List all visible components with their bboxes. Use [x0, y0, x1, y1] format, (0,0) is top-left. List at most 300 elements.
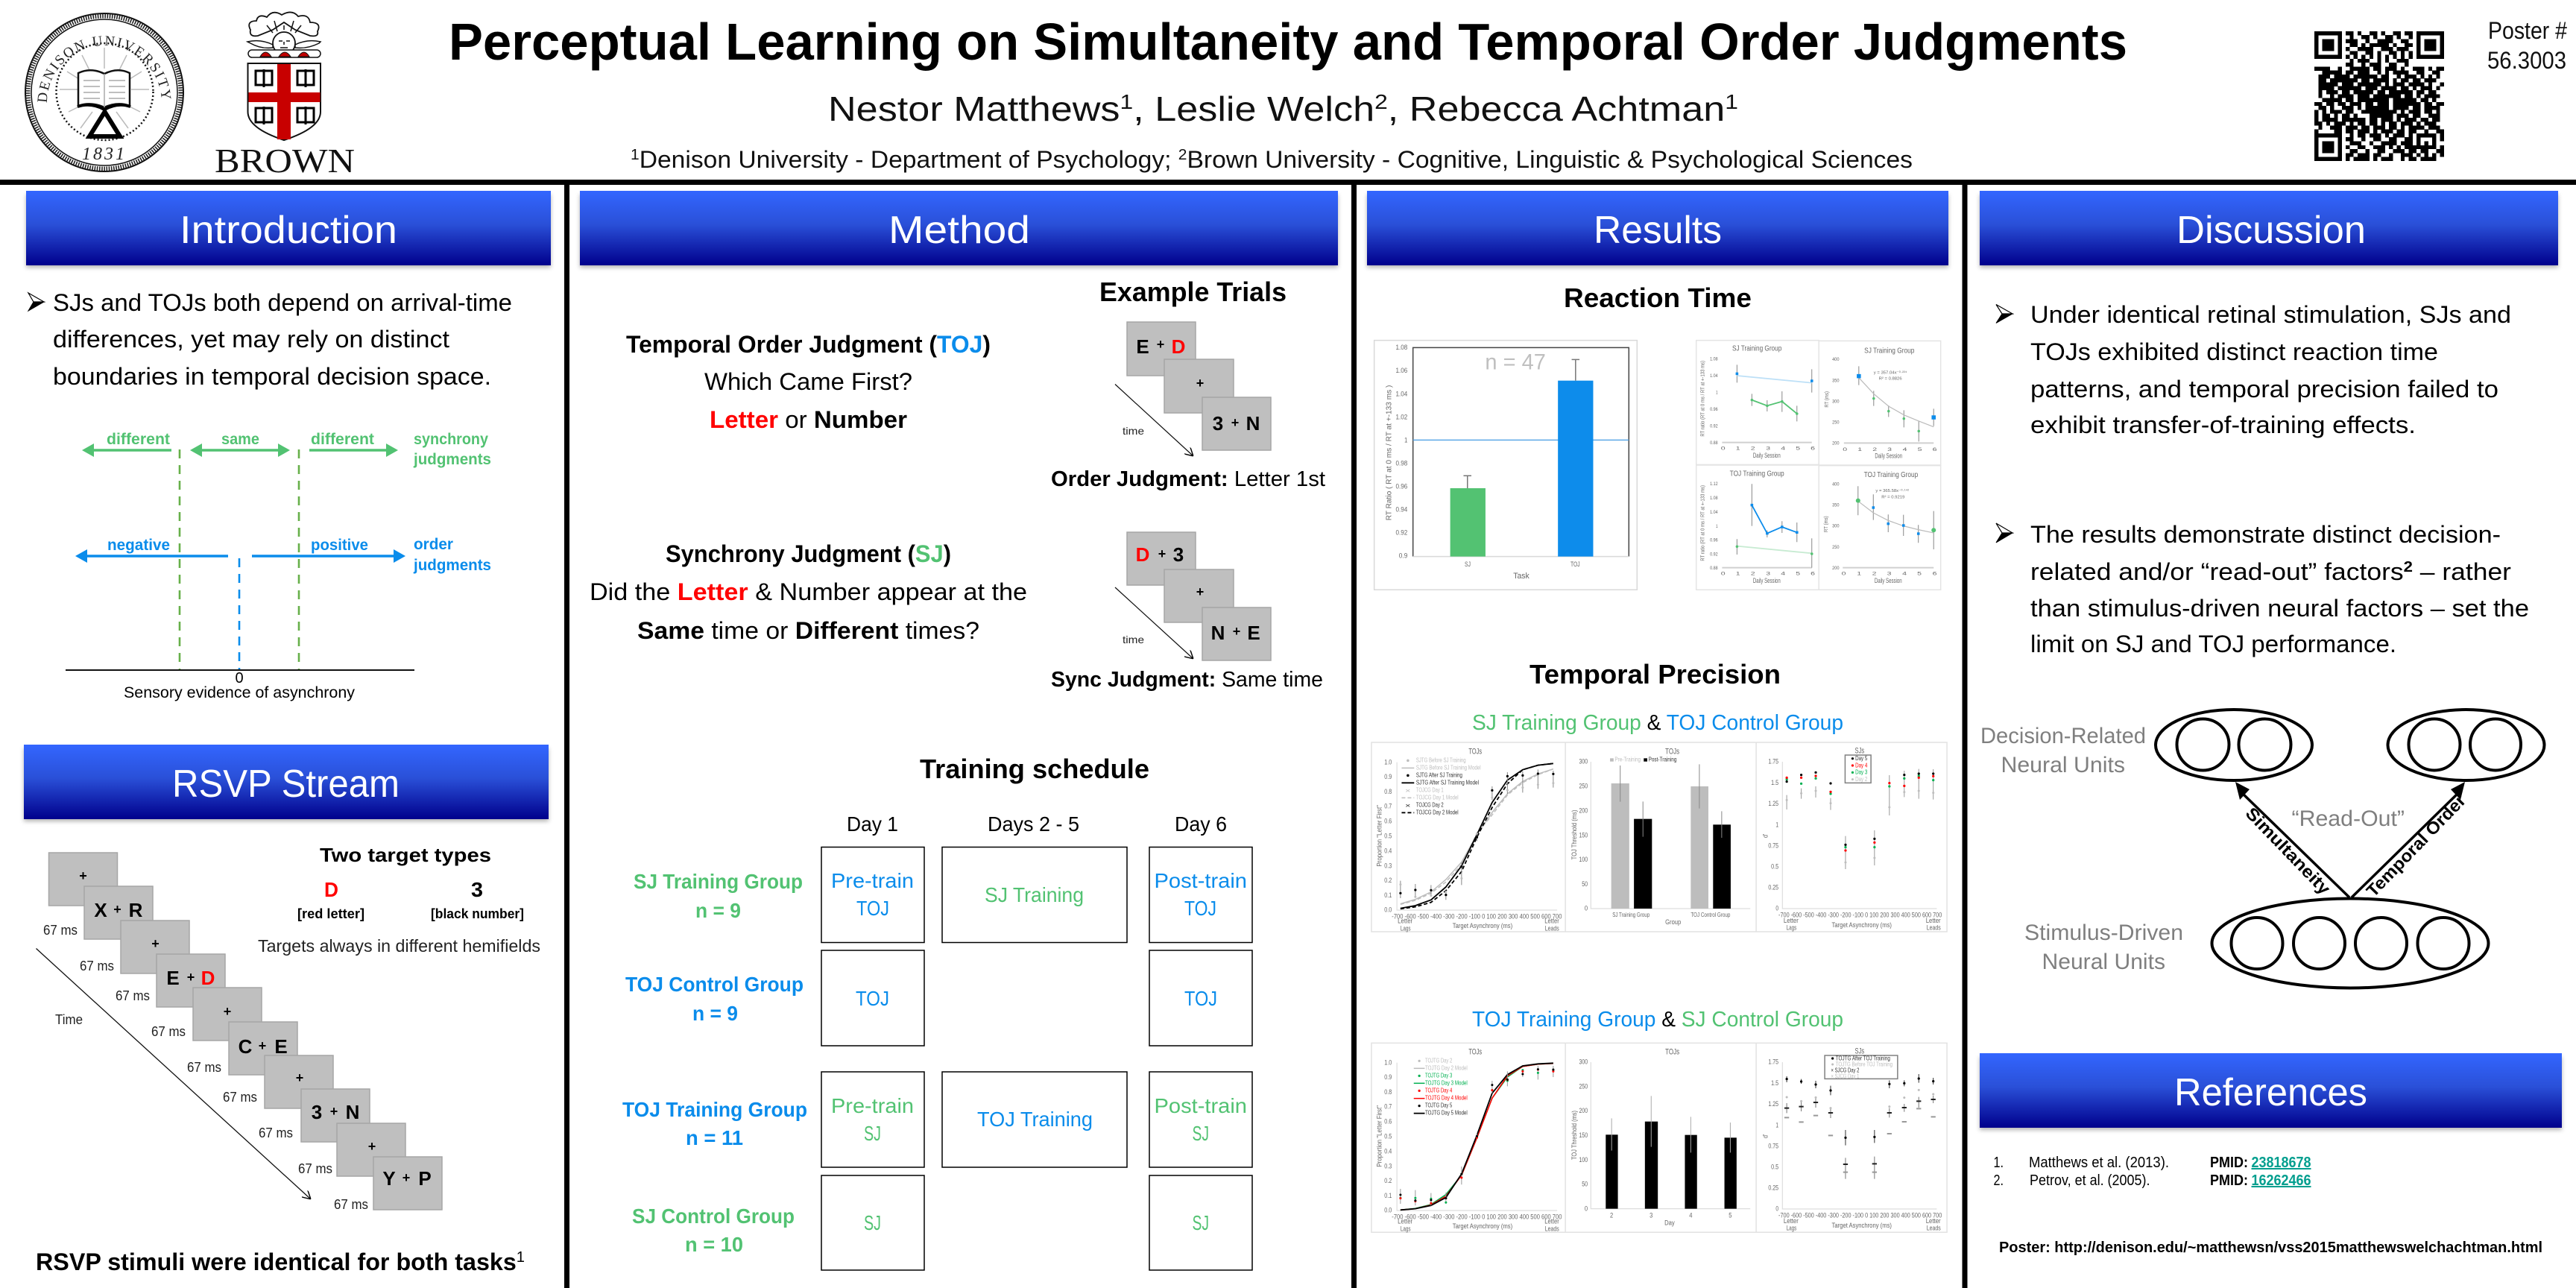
panel: Results: [1367, 191, 1948, 1233]
panel: RSVP Stream: [24, 745, 549, 1275]
line charts: RT by training group: 0123456: [1842, 571, 1937, 576]
chart row: SJ training and TOJ control: Day 5: [1855, 755, 1867, 762]
RSVP frame sequence: Y: [382, 1167, 396, 1190]
frame durations: [43, 923, 368, 1212]
schedule table: Post-train: [1154, 1094, 1247, 1117]
chart row: SJ training and TOJ control: 0.7: [1384, 802, 1392, 810]
schedule table: TOJ: [1184, 987, 1217, 1010]
chart row: SJ training and TOJ control: Group: [1665, 918, 1681, 926]
schedule table: SJ: [864, 1122, 881, 1145]
line charts: RT by training group: RT ratio (RT at 0 ms / RT at +-133 ms): [1700, 485, 1706, 561]
line charts: RT by training group: 0123456: [1721, 446, 1815, 451]
chart row: SJ training and TOJ control: Leads: [1545, 924, 1559, 932]
line charts: RT by training group: 250: [1832, 420, 1840, 425]
line charts: RT by training group: RT ratio (RT at 0 ms / RT at +-133 ms): [1700, 361, 1706, 437]
chart row: SJ training and TOJ control: SJs: [1855, 746, 1864, 756]
reference list: 2.: [1993, 1172, 2004, 1189]
bar chart: RT ratio: 1.02: [1396, 413, 1407, 421]
chart row: SJ training and TOJ control: 0.25: [1768, 883, 1778, 891]
frame durations: 67 ms: [43, 923, 78, 938]
chart row: SJ training and TOJ control: TOJCG Day 2 Model: [1416, 809, 1459, 816]
diagram: decision boundaries: [66, 431, 491, 701]
chart row: TOJ training and SJ control: 250: [1579, 1082, 1588, 1090]
line charts: RT by training group: 1.04: [1710, 373, 1718, 379]
example: order judgment trial: N: [1246, 412, 1260, 435]
chart row: SJ training and TOJ control: TOJs: [1468, 747, 1482, 757]
RSVP frame sequence: X: [94, 899, 107, 921]
chart row: SJ training and TOJ control: Day 4: [1855, 763, 1867, 769]
chart row: TOJ training and SJ control: Target Asynchrony (ms): [1453, 1222, 1512, 1230]
chart row: SJ training and TOJ control: 0.0: [1384, 906, 1392, 914]
schedule group labels: SJ Training Group: [634, 870, 803, 893]
chart row: SJ training and TOJ control: 0.5: [1771, 862, 1778, 871]
RSVP caption: RSVP stimuli were identical for both tasks: [36, 1248, 513, 1275]
diagram: decision boundaries: Sensory evidence of asynchrony: [124, 684, 356, 701]
bullet text: [28, 289, 512, 390]
example: order judgment trial: 3: [1213, 412, 1223, 435]
line charts: RT by training group: 200: [1832, 565, 1840, 570]
target types legend: [258, 844, 540, 956]
chart row: SJ training and TOJ control: 0.5: [1384, 832, 1392, 840]
RSVP frame sequence: N: [346, 1101, 359, 1123]
example: order judgment trial: D: [1172, 335, 1185, 358]
heading: Method: [580, 191, 1338, 268]
example: sync judgment trial: +: [1233, 624, 1240, 639]
chart row: SJ training and TOJ control: Letter: [1544, 917, 1559, 925]
schedule table: Day 6: [1175, 812, 1227, 836]
bullet text: SJs and TOJs both depend on arrival-time: [53, 289, 512, 316]
chart row: SJ training and TOJ control: d': [1761, 833, 1770, 838]
line charts: RT by training group: 0.88: [1710, 565, 1718, 570]
line charts: RT by training group: R² = 0.8826: [1879, 376, 1902, 381]
line charts: RT by training group: [1696, 341, 1941, 590]
panel: Discussion: [1980, 191, 2558, 988]
chart row: TOJ training and SJ control: 1: [1775, 1121, 1778, 1129]
chart row: SJ training and TOJ control: 300: [1579, 757, 1588, 765]
schedule table: Days 2 - 5: [988, 812, 1079, 836]
chart row: SJ training and TOJ control: 50: [1582, 880, 1588, 888]
line charts: RT by training group: 0.96: [1710, 537, 1718, 543]
RSVP frame sequence: +: [259, 1038, 266, 1053]
bar chart: RT ratio: 0.94: [1396, 505, 1408, 514]
heading: Discussion: Discussion: [2176, 209, 2366, 252]
line charts: RT by training group: 200: [1832, 441, 1840, 446]
chart row: SJ training and TOJ control: 0.4: [1384, 847, 1392, 855]
QR code: [2314, 34, 2444, 159]
chart row: SJ training and TOJ control: ×: [1405, 803, 1411, 809]
diagram: decision boundaries: synchrony: [414, 431, 488, 448]
chart row: SJ training and TOJ control: 200: [1579, 806, 1588, 815]
chart row: SJ training and TOJ control: -700 -600 -500 -400 -300 -200 -100 0 100 200 300 400 500 600 700: [1778, 911, 1942, 919]
heading: Results: Results: [1594, 209, 1722, 252]
target types legend: Two target types: [320, 844, 491, 866]
chart row: TOJ training and SJ control: Target Asynchrony (ms): [1832, 1222, 1892, 1229]
chart row: TOJ training and SJ control: 3: [1650, 1211, 1653, 1219]
logo: Brown University crest: BROWN: [215, 142, 355, 180]
diagram: neural units read-out: Neural Units: [2042, 950, 2165, 974]
chart row: TOJ training and SJ control: × SJCG Day 1: [1831, 1073, 1859, 1080]
chart row: SJ training and TOJ control: Leads: [1927, 924, 1941, 932]
schedule table: Pre-train: [831, 1094, 914, 1117]
bullet: second conclusion: limit on SJ and TOJ performance.: [2030, 631, 2396, 657]
chart row: TOJ training and SJ control: 0.25: [1768, 1184, 1778, 1192]
diagram: neural units read-out: “Read-Out”: [2291, 806, 2405, 831]
chart row: SJ training and TOJ control: TOJCG Day 1 Model: [1416, 795, 1459, 801]
heading: References: References: [2174, 1071, 2367, 1114]
chart row: TOJ training and SJ control: Leads: [1927, 1224, 1941, 1232]
bar chart: RT ratio: RT Ratio ( RT at 0 ms / RT at +-133 ms ): [1384, 385, 1393, 520]
chart row: SJ training and TOJ control: SJTG After SJ Training Model: [1416, 780, 1479, 786]
chart row: TOJ training and SJ control: d': [1761, 1134, 1770, 1138]
line charts: RT by training group: y = 357.04x⁻⁰·²²⁴: [1874, 370, 1907, 375]
target types legend: 3: [471, 878, 483, 901]
line charts: RT by training group: 0.92: [1710, 423, 1718, 429]
chart row: TOJ training and SJ control: Letter: [1926, 1217, 1941, 1225]
reference list: 16262466: [2251, 1172, 2311, 1189]
line charts: RT by training group: 400: [1832, 356, 1840, 362]
authors: Nestor Matthews: [828, 89, 1085, 128]
chart row: SJ training and TOJ control: 150: [1579, 831, 1588, 839]
authors: 2: [1374, 90, 1388, 113]
frame durations: 67 ms: [116, 988, 150, 1003]
line charts: RT by training group: Daily Session: [1875, 577, 1902, 584]
chart row: SJ training and TOJ control: 0: [1775, 904, 1778, 912]
chart row: TOJ training and SJ control: TOJTG Day 4: [1425, 1087, 1452, 1094]
chart row: TOJ training and SJ control: 0.1: [1384, 1192, 1392, 1199]
chart row: SJ training and TOJ control: SJTG After SJ Training: [1416, 772, 1462, 779]
chart row: TOJ training and SJ control: Leads: [1545, 1225, 1559, 1233]
bar chart: RT ratio: SJ: [1465, 561, 1471, 568]
chart row: TOJ training and SJ control: TOJTG Day 2 Model: [1425, 1065, 1468, 1072]
chart row: TOJ training and SJ control: 0.6: [1384, 1117, 1392, 1126]
line charts: RT by training group: 400: [1832, 482, 1840, 487]
chart row: SJ training and TOJ control: Target Asynchrony (ms): [1832, 921, 1892, 929]
line charts: RT by training group: 1.12: [1710, 481, 1718, 486]
diagram: decision boundaries: judgments: [413, 557, 491, 574]
diagram: neural units read-out: Stimulus-Driven: [2024, 921, 2183, 945]
text: TOJ task description: Temporal Order Judgment (TOJ): [626, 331, 991, 358]
schedule table: Post-train: [1154, 869, 1247, 892]
line charts: RT by training group: 1.08: [1710, 356, 1718, 362]
chart row: SJ training and TOJ control: Pre-Training: [1614, 757, 1641, 763]
affiliations: 1: [631, 147, 640, 163]
example: sync judgment trial: time: [1123, 634, 1144, 645]
chart row: TOJ training and SJ control: 1.0: [1384, 1058, 1392, 1067]
RSVP frame sequence: R: [129, 899, 143, 921]
chart row: TOJ training and SJ control: 0.8: [1384, 1088, 1392, 1096]
schedule group labels: n = 9: [692, 1002, 738, 1025]
chart row: SJ training and TOJ control: Letter: [1398, 917, 1412, 925]
line charts: RT by training group: 300: [1832, 398, 1840, 404]
chart row: TOJ training and SJ control: TOJTG Day 5: [1425, 1102, 1452, 1109]
chart row: SJ training and TOJ control: 1.0: [1384, 758, 1392, 766]
bullet: first conclusion: Under identical retinal stimulation, SJs and: [2030, 301, 2511, 328]
RSVP frame sequence: E: [274, 1035, 288, 1058]
poster number: [2487, 17, 2567, 74]
RSVP frame sequence: +: [296, 1070, 303, 1085]
chart row: SJ training and TOJ control: TOJ Control Group: [1690, 912, 1730, 918]
schedule table: [821, 812, 1252, 1270]
panel: Introduction: [26, 191, 551, 701]
chart row: SJ training and TOJ control: ×: [1405, 788, 1411, 795]
bar chart: RT ratio: 1: [1404, 436, 1408, 444]
bullet text: differences, yet may rely on distinct: [53, 326, 449, 353]
diagram: neural units read-out: Decision-Related: [1980, 724, 2146, 748]
chart row: SJ training and TOJ control: Letter: [1926, 917, 1941, 924]
line charts: RT by training group: 0.88: [1710, 440, 1718, 445]
text: TOJ task description: Letter or Number: [710, 406, 907, 433]
example: order judgment trial: +: [1196, 376, 1204, 391]
chart row: TOJ training and SJ control: 0.9: [1384, 1073, 1392, 1081]
bar chart: RT ratio: Task: [1513, 571, 1530, 581]
chart row: TOJ training and SJ control: 0.75: [1768, 1142, 1778, 1150]
chart row: SJ training and TOJ control: SJTG Before SJ Training Model: [1416, 765, 1481, 771]
chart row: SJ training and TOJ control: Post-Training: [1649, 757, 1676, 763]
bullet text: boundaries in temporal decision space.: [53, 363, 491, 390]
diagram: decision boundaries: different: [311, 431, 374, 448]
chart row: TOJ training and SJ control: TOJTG Day 5 Model: [1425, 1110, 1468, 1117]
text: SJ task description: Did the Letter & Number appear at the: [590, 578, 1027, 605]
chart row: SJ training and TOJ control: 0.2: [1384, 877, 1392, 884]
chart row: TOJ training and SJ control: Letter: [1784, 1217, 1799, 1225]
schedule table: TOJ Training: [977, 1108, 1093, 1131]
authors: , Rebecca Achtman: [1388, 89, 1725, 128]
bullet: first conclusion: patterns, and temporal precision failed to: [2030, 376, 2498, 402]
chart row: SJ training and TOJ control: 1.25: [1768, 800, 1778, 807]
line charts: RT by training group: 0123456: [1843, 446, 1937, 452]
chart row: TOJ training and SJ control: 0.4: [1384, 1147, 1392, 1155]
subheading: SJ training and TOJ control: SJ Training Group & TOJ Control Group: [1472, 711, 1843, 735]
line charts: RT by training group: 350: [1832, 377, 1840, 383]
heading: Reaction Time: Reaction Time: [1564, 282, 1752, 313]
bullet: second conclusion: 2: [2404, 559, 2413, 575]
chart row: TOJ training and SJ control: Letter: [1544, 1217, 1559, 1225]
caption: order judgment: Order Judgment: Letter 1st: [1051, 467, 1325, 491]
chart row: TOJ training and SJ control: TOJTG Before TOJ Training: [1836, 1061, 1892, 1068]
RSVP frame sequence: +: [151, 936, 160, 951]
logo: Denison University seal: [25, 13, 184, 172]
reference list: [1993, 1155, 2311, 1189]
frame durations: 67 ms: [223, 1090, 257, 1105]
chart row: TOJ training and SJ control: Lags: [1787, 1224, 1796, 1232]
panel: References: [1980, 1053, 2562, 1256]
chart row: TOJ training and SJ control: 150: [1579, 1131, 1588, 1139]
chart row: TOJ training and SJ control: TOJTG Day 4 Model: [1425, 1095, 1468, 1102]
chart row: SJ training and TOJ control: 0: [1585, 904, 1588, 912]
heading: Introduction: Introduction: [180, 209, 397, 252]
poster number: Poster #: [2488, 17, 2567, 44]
line charts: RT by training group: 0.92: [1710, 551, 1718, 557]
schedule table: Pre-train: [831, 869, 914, 892]
chart row: SJ training and TOJ control: Proportion "Letter First": [1375, 805, 1383, 867]
RSVP frame sequence: C: [239, 1035, 253, 1058]
chart row: TOJ training and SJ control: 0.7: [1384, 1102, 1392, 1111]
chart row: TOJ training and SJ control: 300: [1579, 1058, 1588, 1066]
bullet: second conclusion: The results demonstrate distinct decision-: [2030, 521, 2501, 548]
chart row: TOJ training and SJ control: TOJs: [1468, 1047, 1482, 1057]
bullet: second conclusion: related and/or “read-out” factors: [2030, 558, 2367, 585]
chart row: SJ training and TOJ control: 1.75: [1768, 757, 1778, 765]
bullet: first conclusion: [1996, 301, 2511, 438]
chart row: TOJ training and SJ control: Letter: [1398, 1217, 1412, 1225]
caption: sync judgment: Sync Judgment: Same time: [1051, 668, 1323, 692]
schedule group labels: n = 11: [686, 1126, 743, 1149]
chart row: TOJ training and SJ control: 2: [1610, 1211, 1613, 1219]
line charts: RT by training group: 350: [1832, 502, 1840, 508]
chart row: TOJ training and SJ control: 0: [1775, 1205, 1778, 1213]
bar chart: RT ratio: 0.96: [1396, 482, 1408, 490]
line charts: RT by training group: 1: [1716, 389, 1718, 395]
chart row: SJ training and TOJ control: 0.3: [1384, 862, 1392, 870]
chart row: SJ training and TOJ control: 1.5: [1771, 779, 1778, 786]
bar chart: RT ratio: 1.04: [1396, 390, 1408, 398]
text: SJ task description: Synchrony Judgment (SJ): [666, 540, 951, 567]
line charts: RT by training group: 0123456: [1721, 571, 1815, 576]
chart row: SJ training and TOJ control: 1: [1775, 821, 1778, 829]
RSVP frame sequence: +: [79, 868, 87, 883]
poster URL: Poster: http://denison.edu/~matthewsn/vss2015matthewswelchachtman.html: [1999, 1240, 2542, 1256]
bullet: second conclusion: [1996, 521, 2529, 657]
affiliations: Brown University - Cognitive, Linguistic & Psychological Sciences: [1187, 146, 1913, 173]
frame durations: 67 ms: [298, 1161, 332, 1176]
RSVP frame sequence: +: [113, 902, 121, 917]
example: sync judgment trial: [1115, 532, 1271, 660]
authors: 1: [1725, 90, 1738, 113]
chart row: TOJ training and SJ control: 200: [1579, 1107, 1588, 1114]
affiliations: 2: [1178, 147, 1187, 163]
target types legend: [red letter]: [297, 906, 364, 921]
line charts: RT by training group: SJ Training Group: [1864, 346, 1914, 355]
heading: Training schedule: Training schedule: [920, 754, 1149, 784]
bar chart: RT ratio: 1.06: [1396, 367, 1408, 374]
reference list: Petrov, et al. (2005).: [2030, 1172, 2150, 1189]
chart row: TOJ training and SJ control: TOJ Threshold (ms): [1570, 1111, 1578, 1160]
text: SJ task description: Same time or Different times?: [637, 617, 979, 644]
chart row: SJ training and TOJ control: Lags: [1787, 924, 1796, 932]
example: sync judgment trial: N: [1211, 622, 1225, 644]
schedule table: SJ Training: [985, 883, 1084, 906]
bullet: first conclusion: exhibit transfer-of-training effects.: [2030, 411, 2416, 438]
diagram: decision boundaries: positive: [311, 537, 368, 554]
example: sync judgment trial: +: [1196, 584, 1204, 599]
bar chart: RT ratio: 0.92: [1396, 528, 1407, 537]
frame durations: 67 ms: [80, 959, 114, 973]
line charts: RT by training group: RT (ms): [1824, 391, 1830, 408]
chart row: TOJ training and SJ control: 0.0: [1384, 1206, 1392, 1214]
diagram: decision boundaries: different: [107, 431, 170, 448]
bullet: second conclusion: – rather: [2413, 558, 2511, 585]
example: sync judgment trial: 3: [1173, 543, 1184, 566]
reference list: 23818678: [2251, 1155, 2311, 1171]
bar chart: RT ratio: 1.08: [1396, 344, 1408, 351]
heading: Temporal Precision: Temporal Precision: [1530, 659, 1781, 689]
chart row: SJ training and TOJ control: Day 2: [1855, 776, 1867, 783]
chart row: SJ training and TOJ control: TOJCG Day 2: [1416, 802, 1444, 809]
frame durations: 67 ms: [151, 1024, 186, 1039]
chart row: TOJ training and SJ control: Lags: [1401, 1225, 1411, 1233]
heading: Results: [1367, 191, 1948, 268]
diagram: neural units read-out: Neural Units: [2001, 753, 2125, 777]
chart row: TOJ training and SJ control: -700 -600 -500 -400 -300 -200 -100 0 100 200 300 400 500 600 700: [1778, 1211, 1942, 1219]
RSVP frame sequence: 3: [312, 1101, 322, 1123]
schedule table: SJ: [1193, 1122, 1209, 1145]
diagram: neural units read-out: Simultaneity: [2242, 804, 2334, 898]
target types legend: [black number]: [431, 906, 524, 921]
chart row: SJ training and TOJ control: Target Asynchrony (ms): [1453, 922, 1512, 929]
line charts: RT by training group: TOJ Training Group: [1730, 470, 1784, 478]
chart row: TOJ training and SJ control: 5: [1729, 1211, 1732, 1219]
line charts: RT by training group: 300: [1832, 523, 1840, 528]
text: SJ task description: [590, 540, 1027, 644]
RSVP frame sequence: E: [166, 967, 180, 989]
chart row: TOJ training and SJ control: 4: [1689, 1211, 1693, 1219]
chart row: SJ training and TOJ control: 0.8: [1384, 788, 1392, 795]
line charts: RT by training group: Daily Session: [1753, 577, 1781, 584]
heading: Introduction: [26, 191, 551, 268]
diagram: neural units read-out: Temporal Order: [2362, 791, 2469, 900]
chart row: SJ training and TOJ control: 0.75: [1768, 842, 1778, 850]
diagram: neural units read-out: [1980, 710, 2545, 988]
chart row: SJ training and TOJ control: TOJCG Day 1: [1416, 787, 1444, 794]
line charts: RT by training group: y = 365.58x⁻⁰·¹⁴²: [1875, 488, 1909, 493]
arrow: time axis: Time: [55, 1012, 83, 1027]
chart row: TOJ training and SJ control: TOJTG Day 3: [1425, 1073, 1452, 1079]
reference list: PMID:: [2210, 1172, 2248, 1189]
schedule table: TOJ: [856, 987, 889, 1010]
target types legend: Targets always in different hemifields: [258, 936, 540, 956]
schedule table: TOJ: [856, 897, 889, 920]
chart row: TOJ training and SJ control: 0.3: [1384, 1162, 1392, 1170]
heading: RSVP Stream: RSVP Stream: [172, 763, 400, 806]
chart row: TOJ training and SJ control: 50: [1582, 1180, 1588, 1188]
line charts: RT by training group: R² = 0.9219: [1881, 494, 1904, 499]
chart row: SJ training and TOJ control: Letter: [1784, 917, 1799, 924]
line charts: RT by training group: Daily Session: [1875, 452, 1902, 460]
reference list: Matthews et al. (2013).: [2029, 1155, 2169, 1171]
example: order judgment trial: +: [1157, 337, 1164, 352]
chart row: TOJ training and SJ control: 100: [1579, 1156, 1588, 1164]
line charts: RT by training group: RT (ms): [1823, 516, 1829, 532]
example: order judgment trial: time: [1123, 425, 1144, 437]
bar chart: RT ratio: 0.9: [1399, 552, 1408, 560]
chart row: SJ training and TOJ control: 100: [1579, 856, 1588, 863]
chart row: TOJ training and SJ control: 1.5: [1771, 1079, 1778, 1087]
RSVP frame sequence: +: [402, 1170, 410, 1185]
authors: , Leslie Welch: [1133, 89, 1374, 128]
heading: RSVP Stream: [24, 745, 549, 821]
schedule group labels: TOJ Training Group: [622, 1098, 807, 1121]
chart row: SJ training and TOJ control: Day 3: [1855, 769, 1867, 776]
chart row: TOJ training and SJ control: × SJCG Day 2: [1831, 1067, 1859, 1074]
chart row: TOJ training and SJ control: TOJTG After TOJ Training: [1836, 1055, 1890, 1062]
frame durations: 67 ms: [334, 1197, 368, 1212]
logo: Brown University crest: [215, 12, 355, 180]
poster number: 56.3003: [2487, 47, 2566, 74]
RSVP frame sequence: +: [187, 970, 195, 985]
chart row: SJ training and TOJ control: SJTG Before SJ Training: [1416, 757, 1466, 764]
chart row: SJ training and TOJ control: TOJs: [1665, 747, 1679, 757]
subheading: TOJ training and SJ control: TOJ Training Group & SJ Control Group: [1472, 1008, 1843, 1032]
chart row: TOJ training and SJ control: 0: [1585, 1205, 1588, 1213]
example: order judgment trial: E: [1136, 335, 1149, 358]
example: sync judgment trial: +: [1158, 546, 1166, 561]
chart row: TOJ training and SJ control: -700 -600 -500 -400 -300 -200 -100 0 100 200 300 400 500 600 700: [1392, 1213, 1562, 1221]
line charts: RT by training group: 1.04: [1710, 509, 1718, 514]
chart row: TOJ training and SJ control: Proportion "Letter First": [1375, 1105, 1383, 1167]
example: sync judgment trial: E: [1247, 622, 1260, 644]
chart row: TOJ training and SJ control: [1371, 1043, 1947, 1233]
chart row: TOJ training and SJ control: TOJs: [1665, 1047, 1679, 1057]
